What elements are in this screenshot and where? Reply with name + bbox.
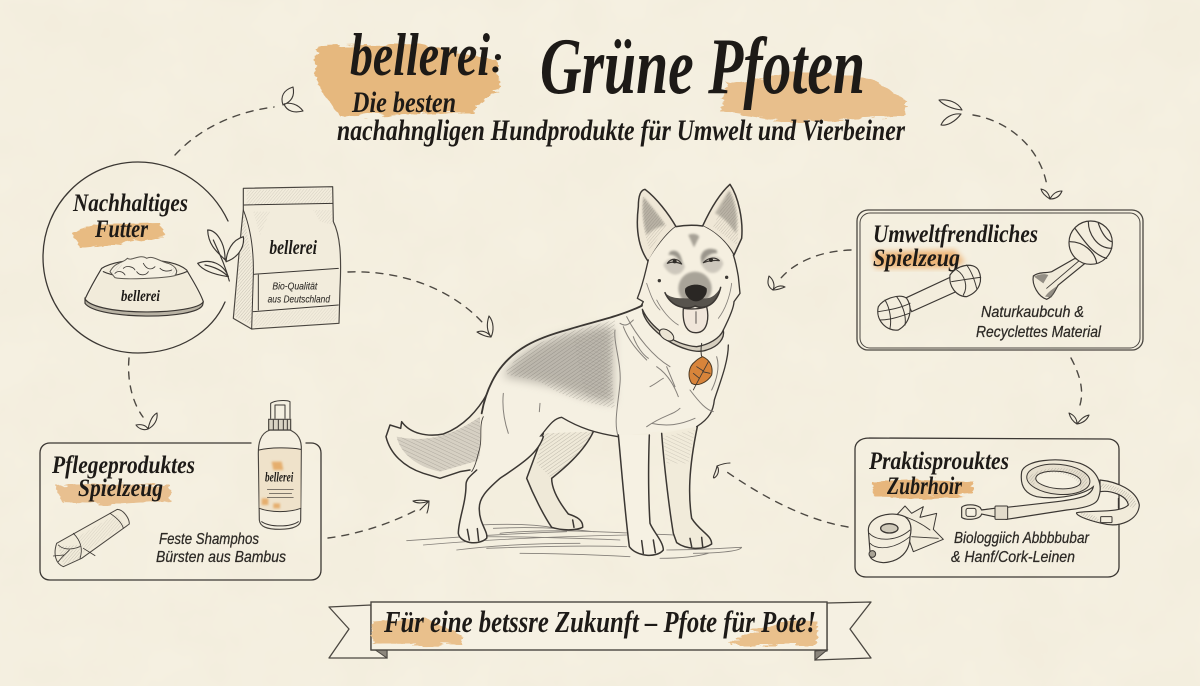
dashed arrow: accessories panel to dog xyxy=(713,463,848,527)
left ear xyxy=(637,189,676,262)
brush stroke: Grüne Pfoten xyxy=(720,72,906,122)
description: Naturkaubcuh & xyxy=(981,304,1084,321)
brush stroke: Futter xyxy=(72,223,165,248)
dashed arrow: title to toy panel xyxy=(939,100,1062,199)
near hind leg xyxy=(458,417,543,543)
dashed arrow: circle to title xyxy=(175,87,303,155)
brush stroke: Spielzeug xyxy=(56,484,170,504)
panel: Praktische Produkte Zubehör xyxy=(855,438,1139,577)
muzzle shading xyxy=(678,272,712,305)
brush stroke left xyxy=(372,618,462,645)
icon: leaf sprig xyxy=(198,230,244,281)
banner left tail xyxy=(329,605,387,658)
eye sockets xyxy=(663,256,723,275)
heading: Pflegeproduktes: Pflegeproduktes xyxy=(51,452,195,479)
panel: Nachhaltiges Futter xyxy=(43,162,341,353)
forehead mark xyxy=(688,234,699,247)
head xyxy=(637,225,740,335)
icon: soap bar with bamboo brush xyxy=(53,509,129,567)
colon: : xyxy=(491,39,504,81)
description: Feste Shamphos xyxy=(159,531,259,548)
near front leg xyxy=(618,435,663,555)
description: Biologgiich Abbbbubar xyxy=(954,530,1090,547)
title block xyxy=(314,22,906,147)
dashed arrow: toy panel to accessories panel xyxy=(1069,358,1089,424)
panel: Pflegeprodukte: Bürsten aus Bambus xyxy=(156,549,286,566)
brush stroke: Zubrhoir xyxy=(872,480,974,498)
icon: waste bag roll xyxy=(868,506,943,563)
icon: food bowl: bellerei xyxy=(121,288,161,305)
central dog illustration xyxy=(386,184,742,558)
circle outline xyxy=(43,162,228,353)
banner folds xyxy=(371,647,827,660)
dashed arrow: circle to care panel xyxy=(129,358,157,430)
leaf tag xyxy=(689,343,712,390)
heading: Grüne Pfoten: Grüne Pfoten xyxy=(540,23,865,111)
tail xyxy=(386,393,487,478)
heading: Futter: Futter xyxy=(94,216,148,243)
brush stroke: Spielzeug xyxy=(873,250,965,268)
heading: Nachhaltiges: Nachhaltiges xyxy=(72,190,188,217)
heading: Praktisprouktes: Praktisprouktes xyxy=(868,448,1009,475)
brows xyxy=(668,249,717,265)
subtitle line two: nachahngligen Hundprodukte für Umwelt und Vierbeiner xyxy=(337,114,905,147)
dashed arrow: bag to dog xyxy=(348,272,493,337)
collar xyxy=(642,309,724,351)
icon: spray bottle: bellerei xyxy=(265,470,294,485)
heading: Zubrhoir: Zubrhoir xyxy=(886,473,962,500)
panel frame xyxy=(40,443,321,580)
right ear xyxy=(703,184,742,255)
icon: food bag: Bio-Qualität xyxy=(272,281,318,292)
panel frame xyxy=(855,438,1119,577)
icon: food bag xyxy=(233,187,341,329)
ground shading xyxy=(407,524,742,558)
eyes xyxy=(667,258,719,264)
heading: bellerei: bellerei xyxy=(350,22,490,88)
dashed arrow: toy panel to dog xyxy=(768,250,851,290)
panel: Pflegeprodukte xyxy=(40,401,321,580)
heading: Spielzeug: Spielzeug xyxy=(78,475,163,502)
panel: Umweltfreundliches Spielzeug: Recyclettes Material xyxy=(976,324,1101,341)
subtitle line one: Die besten xyxy=(351,86,456,119)
brush stroke right xyxy=(730,620,818,645)
heading: Umweltfrendliches: Umweltfrendliches xyxy=(873,221,1038,248)
banner body xyxy=(371,602,827,650)
nose xyxy=(685,285,707,301)
panel: Praktische Produkte Zubehör: & Hanf/Cork-Leinen xyxy=(951,549,1075,566)
dashed arrow: care panel to dog xyxy=(328,500,429,538)
far front leg xyxy=(662,427,712,548)
banner right tail xyxy=(815,602,871,660)
closing banner xyxy=(329,602,871,660)
far hind leg xyxy=(527,432,593,530)
icon: food bag: aus Deutschland xyxy=(268,295,330,306)
icon: leash and collar xyxy=(962,460,1139,525)
tongue xyxy=(683,307,708,333)
icon: food bag: bellerei xyxy=(269,237,317,259)
icon: rope bone right xyxy=(1033,221,1112,299)
saddle shading xyxy=(503,327,613,403)
banner text: Für eine betssre Zukunft – Pfote für Pote! xyxy=(383,604,816,639)
panel frame xyxy=(857,210,1143,350)
panel: Umweltfreundliches Spielzeug xyxy=(857,210,1143,350)
icon: spray bottle xyxy=(258,401,301,529)
mouth xyxy=(665,287,721,308)
body and chest xyxy=(477,305,728,472)
icon: food bowl xyxy=(85,257,203,316)
icon: rope bone left xyxy=(878,265,981,330)
heading: Spielzeug: Spielzeug xyxy=(873,245,960,272)
kibble xyxy=(110,257,177,279)
brush stroke: bellerei xyxy=(314,44,500,116)
